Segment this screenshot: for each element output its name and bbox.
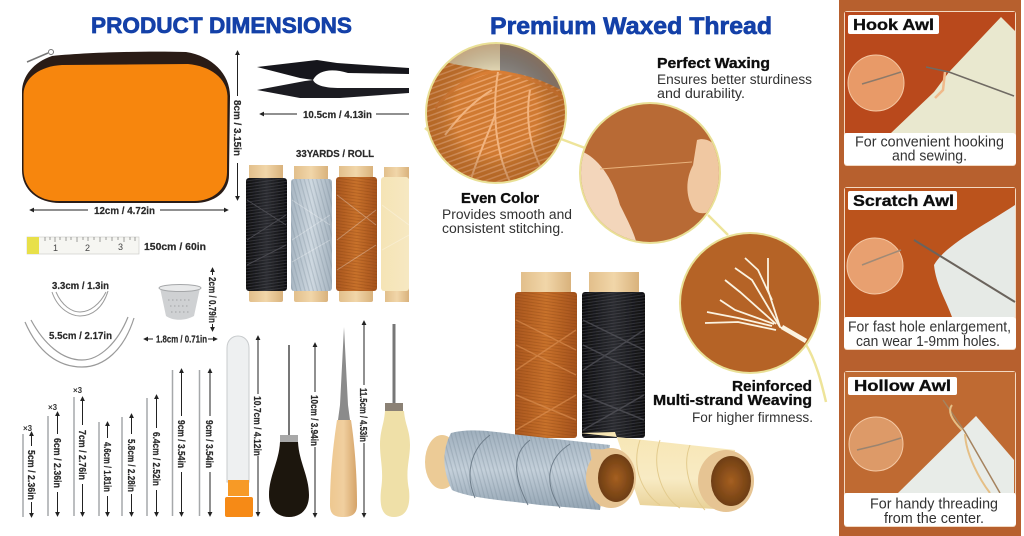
text: perfect waxing: Perfect Waxing	[657, 55, 770, 72]
icon: measuring tape: 2	[85, 243, 90, 253]
card: hook awl	[844, 11, 1016, 166]
magnifier circle	[848, 55, 904, 111]
text: even color: consistent stitching.	[442, 221, 564, 236]
magnifier circle	[849, 417, 903, 471]
paper sheet	[891, 17, 1015, 133]
icon: large curved needle	[25, 317, 134, 367]
name tag: Scratch Awl	[853, 193, 954, 210]
arrow: scratch awl length: 11.5cm / 4.53in	[357, 388, 368, 442]
icon: measuring tape	[27, 237, 139, 254]
text: even color: Provides smooth and	[442, 207, 572, 222]
arrow: thimble height: 2cm / 0.79in	[206, 277, 217, 323]
label: tape length: 150cm / 60in	[144, 242, 206, 253]
hollow awl needle	[943, 400, 1000, 493]
label: small curved needle: 3.3cm / 1.3in	[52, 281, 109, 292]
arrow: scissors length: 10.5cm / 4.13in	[303, 110, 372, 121]
caption: from the center.	[884, 511, 984, 527]
paper sheet	[934, 205, 1015, 317]
icon: upright black spool	[582, 272, 645, 438]
icon and label: straight needle 5.8cm: 5.8cm / 2.28in	[125, 439, 136, 492]
icon and label: straight needle 5cm: 5cm / 2.36in	[25, 450, 36, 500]
thread strand	[950, 405, 990, 493]
icon and label: straight needle 6cm: ×3	[48, 403, 58, 412]
leather backdrop	[839, 0, 1024, 536]
icon: hook awl with black handle	[269, 345, 309, 517]
icon and label: straight needle 4.6cm: 4.6cm / 1.81in	[101, 442, 112, 492]
name tag: Hook Awl	[853, 17, 934, 34]
icon and label: straight needle 5cm: ×3	[23, 424, 33, 433]
icon and label: straight needle 5cm	[23, 424, 36, 517]
text: reinforced weaving: Multi-strand Weaving	[653, 392, 812, 409]
panel: premium waxed thread	[425, 13, 826, 512]
caption: For fast hole enlargement,	[848, 320, 1011, 336]
magnifier circle	[847, 238, 903, 294]
arrow: tube length: 10.7cm / 4.12in	[251, 396, 262, 456]
icon: black scissors	[257, 60, 409, 98]
circle: thread closeup	[425, 42, 570, 184]
heading: premium waxed thread: Premium Waxed Thread	[490, 13, 772, 40]
icon: hollow awl with pale wood handle	[380, 324, 410, 517]
panel: awl types	[839, 0, 1024, 536]
icon and label: straight needle 9cm: 9cm / 3.54in	[175, 420, 186, 468]
text: perfect waxing: Ensures better sturdiness	[657, 72, 812, 87]
text: reinforced weaving: Reinforced	[732, 378, 812, 395]
icon: orange zip case	[22, 50, 230, 203]
caption: can wear 1-9mm holes.	[856, 334, 1000, 350]
icon and label: straight needle 5.8cm	[122, 414, 136, 516]
icon: upright orange spool	[515, 272, 577, 438]
circle: multi-strand closeup	[679, 232, 821, 374]
icon: small curved needle	[52, 291, 108, 316]
heading: product dimensions: PRODUCT DIMENSIONS	[91, 13, 352, 38]
caption: and sewing.	[892, 148, 967, 164]
text: perfect waxing: and durability.	[657, 86, 745, 101]
circle: waxing closeup	[578, 102, 722, 245]
icon and label: straight needle 7cm: 7cm / 2.76in	[76, 430, 87, 480]
icon and label: straight needle 4.6cm	[99, 422, 112, 516]
text: reinforced weaving	[653, 378, 813, 425]
icon and label: straight needle 9cm second: 9cm / 3.54in	[203, 420, 214, 468]
thread strand	[935, 72, 945, 98]
arrow: case height: 8cm / 3.15in	[231, 100, 242, 156]
icon and label: straight needle 6.4cm: 6.4cm / 2.52in	[150, 432, 161, 486]
text: reinforced weaving: For higher firmness.	[692, 410, 813, 425]
name tag: Hollow Awl	[854, 378, 951, 395]
icon and label: straight needle 7cm	[73, 386, 87, 516]
icon: lying cream spool	[580, 432, 754, 512]
icon: thimble	[159, 284, 201, 320]
icon: lying grey spool	[425, 430, 636, 510]
arrow: hook awl length: 10cm / 3.94in	[308, 395, 319, 446]
caption: For convenient hooking	[855, 134, 1004, 150]
caption: For handy threading	[870, 496, 998, 512]
label: yards per roll: 33YARDS / ROLL	[296, 149, 374, 160]
arrow: thimble width: 1.8cm / 0.71in	[156, 334, 207, 346]
icon: needle storage tube	[225, 336, 253, 517]
scratch awl needle	[914, 240, 1015, 302]
caption	[844, 317, 1016, 350]
arrow: case width: 12cm / 4.72in	[94, 206, 155, 217]
text: perfect waxing	[657, 55, 812, 101]
icon: scratch awl with wood handle	[330, 327, 357, 517]
icon: measuring tape: 1	[53, 243, 58, 253]
icon: measuring tape: 3	[118, 242, 123, 252]
icon and label: straight needle 6.4cm	[147, 395, 161, 516]
paper sheet	[898, 416, 1014, 493]
icon and label: straight needle 7cm: ×3	[73, 386, 83, 395]
icon and label: straight needle 6cm: 6cm / 2.36in	[51, 438, 62, 488]
icon: four thread spools	[246, 165, 409, 302]
connector lines between circles	[425, 128, 826, 402]
caption	[844, 493, 1016, 527]
text: even color: Even Color	[461, 190, 539, 207]
icon and label: straight needle 6cm	[48, 403, 62, 516]
label: large curved needle: 5.5cm / 2.17in	[49, 331, 112, 342]
caption	[844, 133, 1016, 165]
hook awl needle	[926, 67, 1014, 96]
card: hollow awl	[844, 371, 1016, 527]
card: scratch awl	[844, 187, 1016, 350]
text: even color	[442, 190, 572, 236]
panel: product dimensions	[22, 13, 410, 517]
